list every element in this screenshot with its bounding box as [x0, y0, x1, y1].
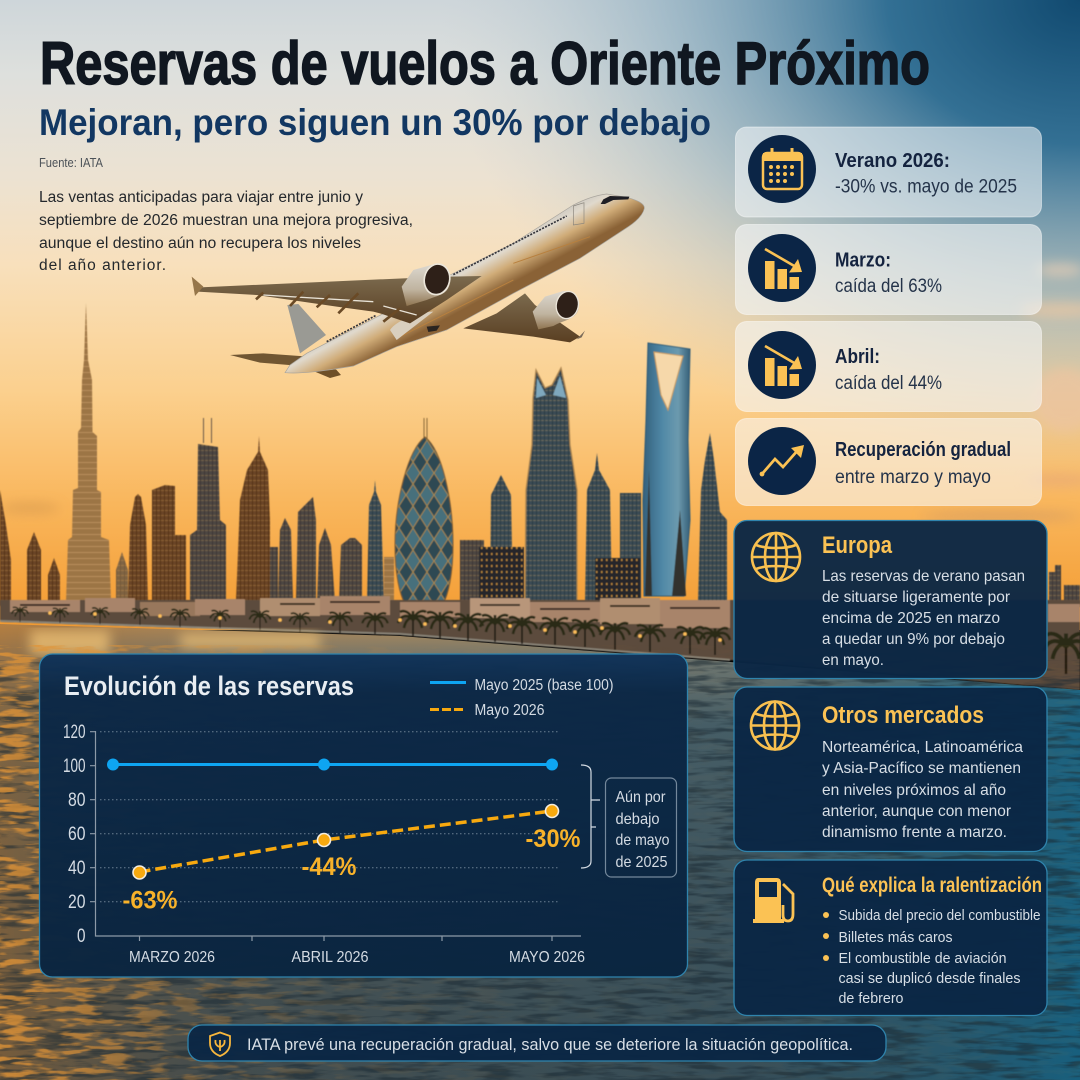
panel: Otros mercados: Otros mercados	[822, 702, 984, 729]
panel: Recuperación gradual: Recuperación gradual	[835, 439, 1011, 461]
bullet list: Subida del precio del combustible	[838, 908, 1040, 924]
panel: Marzo	[736, 224, 1042, 314]
icon: falling bars March	[748, 234, 816, 302]
panel: Otros mercados: dinamismo frente a marzo.	[822, 824, 1007, 841]
chart axes: 40	[68, 858, 86, 879]
panel: Abril: caída del 44%	[835, 373, 942, 394]
panel: Europa: Europa	[822, 532, 893, 559]
icon: falling bars April	[748, 331, 816, 399]
icon: rising trend	[748, 427, 816, 495]
callout: still below May 2025	[606, 778, 676, 877]
series: May 2025 base 100	[107, 758, 558, 770]
panel: Europa: en mayo.	[822, 652, 884, 669]
skyline	[0, 303, 1080, 607]
series: May 2026: -30%	[526, 825, 580, 853]
subtitle: Mejoran, pero siguen un 30% por debajo	[39, 102, 711, 143]
callout: still below May 2025: debajo	[616, 811, 660, 828]
panel: Europa	[734, 520, 1047, 678]
icon: globe Europa	[752, 533, 800, 581]
panel: Otros mercados: anterior, aunque con menor	[822, 803, 1012, 820]
panel: Europa: a quedar un 9% por debajo	[822, 631, 1005, 648]
bullet list	[823, 908, 1040, 1007]
callout: still below May 2025: de mayo	[616, 832, 670, 849]
intro text	[39, 189, 413, 274]
chart axes: MAYO 2026	[509, 949, 585, 966]
icon: globe Otros mercados	[751, 702, 799, 750]
chart axes: 120	[63, 722, 86, 743]
chart axes: 100	[63, 756, 86, 777]
legend: Mayo 2025 (base 100)	[474, 677, 614, 694]
chart axes: MARZO 2026	[129, 949, 215, 966]
panel: Verano 2026: Verano 2026:	[835, 150, 950, 172]
tower: Kingdom Centre	[643, 343, 690, 596]
waterfront buildings and palms	[0, 596, 1080, 690]
chart axes: 80	[68, 790, 86, 811]
icon: fuel pump	[753, 878, 793, 923]
near wing	[197, 276, 482, 323]
tower: Gherkin	[395, 418, 453, 604]
far wing	[463, 293, 580, 342]
legend: Mayo 2026	[474, 702, 544, 719]
panel: Otros mercados: Norteamérica, Latinoamérica	[822, 739, 1023, 756]
panel: Marzo: caída del 63%	[835, 276, 942, 297]
far engine	[533, 291, 579, 329]
panel: Europa: de situarse ligeramente por	[822, 589, 1011, 606]
series: May 2026: -44%	[302, 853, 356, 881]
callout: still below May 2025: de 2025	[616, 854, 668, 871]
panel: Verano 2026	[736, 127, 1042, 217]
series: May 2026	[122, 804, 580, 914]
vertical tail	[287, 304, 326, 353]
chart axes: 60	[68, 824, 86, 845]
chart title: Evolución de las reservas	[64, 671, 354, 701]
panel: Qué explica la ralentización	[734, 860, 1047, 1016]
intro text: septiembre de 2026 muestran una mejora progresiva,	[39, 212, 413, 229]
background: sea with reflections	[0, 624, 1080, 1080]
horizontal stabilizers	[230, 353, 308, 366]
icon: calendar	[748, 135, 816, 203]
source: Fuente: IATA	[39, 155, 103, 170]
near engine	[402, 264, 450, 306]
intro text: Las ventas anticipadas para viajar entre junio y	[39, 189, 363, 206]
panel: Abril	[736, 322, 1042, 412]
bullet list: de febrero	[838, 991, 904, 1007]
series: May 2026: -63%	[122, 886, 178, 914]
panel: Recuperación gradual: entre marzo y mayo	[835, 467, 991, 488]
panel: Verano 2026: -30% vs. mayo de 2025	[835, 176, 1017, 198]
bracket	[581, 765, 600, 868]
panel: Europa: encima de 2025 en marzo	[822, 610, 1000, 627]
fuselage	[285, 194, 644, 373]
icon: shield	[210, 1032, 230, 1056]
bullet list: casi se duplicó desde finales	[838, 971, 1020, 987]
callout: still below May 2025: Aún por	[616, 789, 666, 806]
chart axes: 0	[77, 926, 86, 947]
chart axes	[63, 722, 585, 966]
panel: Abril: Abril:	[835, 346, 880, 368]
intro text: aunque el destino aún no recupera los niveles	[39, 235, 361, 252]
airplane	[192, 194, 644, 378]
footer banner: IATA prevé una recuperación gradual, salvo que se deteriore la situación geopolítica.	[247, 1035, 853, 1054]
footer banner	[188, 1025, 886, 1061]
panel: Marzo: Marzo:	[835, 250, 891, 272]
panel: Otros mercados	[734, 687, 1047, 852]
panel: Otros mercados: en niveles próximos al año	[822, 782, 1006, 799]
bullet list: El combustible de aviación	[838, 951, 1006, 967]
tower: crown skyscraper	[525, 368, 577, 602]
panel: Recuperación gradual	[736, 418, 1042, 506]
bullet list: Billetes más caros	[838, 930, 952, 946]
panel: Otros mercados: y Asia-Pacífico se mantienen	[822, 760, 1021, 777]
panel: Europa: Las reservas de verano pasan	[822, 568, 1025, 585]
panel: line chart	[40, 654, 688, 977]
intro text: del año anterior.	[39, 257, 166, 274]
legend	[430, 677, 614, 719]
tower: Burj Khalifa	[66, 303, 111, 602]
chart axes: ABRIL 2026	[292, 949, 368, 966]
background: sunset sky	[0, 0, 1080, 630]
chart axes: 20	[68, 892, 86, 913]
